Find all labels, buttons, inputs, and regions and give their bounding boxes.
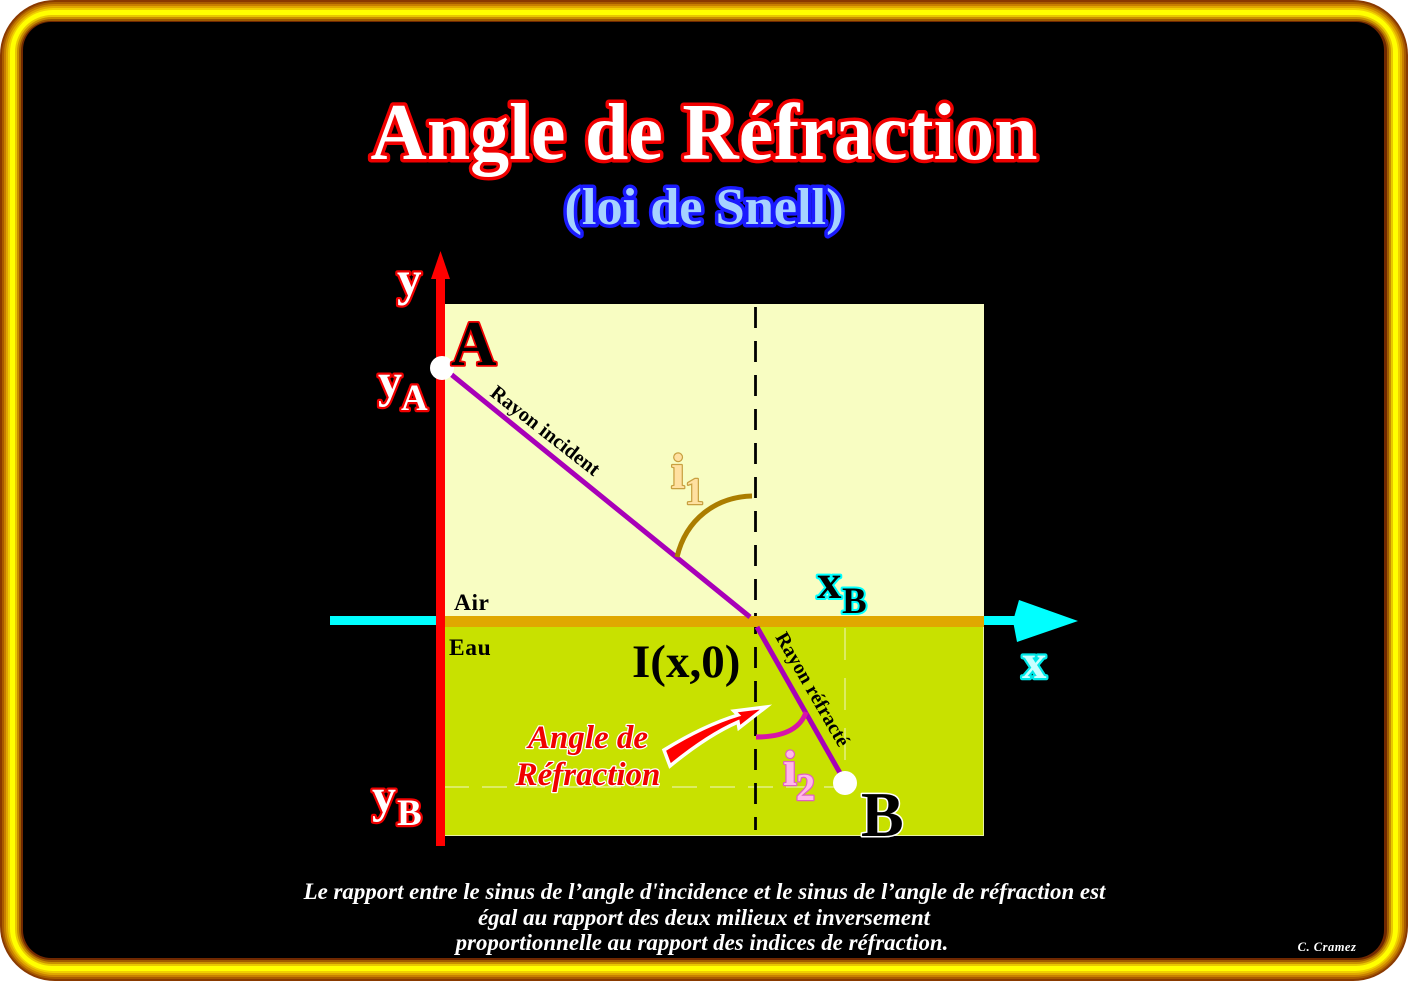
label A: A [451,309,497,379]
label yB: B [397,793,422,834]
incident ray label: Rayon incident [486,382,604,481]
label y: y [397,251,422,306]
label xB [817,554,867,622]
label yA: A [401,378,428,419]
label yA: y [378,355,402,408]
panel: air [444,304,984,618]
panel: water [444,624,984,836]
x axis [330,600,1078,642]
callout: angle de refraction: Angle de [526,720,648,756]
label B: B [861,779,904,850]
y axis [431,251,450,846]
refracted ray label: Rayon réfracté [771,628,854,751]
callout: angle de refraction: Réfraction [515,757,660,793]
panel: refraction diagram [330,251,1078,850]
label i2 [783,740,815,809]
label i2: 2 [796,767,815,809]
explanatory text: égal au rapport des deux milieux et inversement [478,905,931,930]
explanatory text: proportionnelle au rapport des indices de réfraction. [454,930,948,955]
point A [430,356,454,380]
explanatory text: Le rapport entre le sinus de l’angle d'incidence et le sinus de l’angle de réfraction est [303,879,1106,904]
callout: angle de refraction [515,720,660,793]
author credit: C. Cramez [1298,940,1356,954]
explanatory text [303,879,1106,955]
label air: Air [454,590,489,616]
normal dashed line [754,307,757,830]
arrow: callout to angle [664,707,766,766]
incident ray [447,371,750,617]
subtitle: (loi de Snell) [564,179,844,236]
label i1: 1 [685,471,704,513]
label i1: i [671,443,685,499]
title: Angle de Réfraction [370,89,1038,177]
label xB: x [817,554,842,609]
label yB: y [372,770,396,823]
angle arc i1 [677,496,752,557]
y guide for B [444,786,840,788]
label x: x [1022,634,1047,689]
angle arc i2 [756,712,806,737]
label i1 [671,443,704,513]
x guide for B [844,628,846,780]
interface between air and water [444,616,984,627]
label yA [378,355,428,419]
label point I: I(x,0) [632,636,740,688]
label i2: i [783,740,797,796]
refracted ray [757,627,840,773]
label water: Eau [449,635,491,661]
point B [833,771,857,795]
label yB [372,770,422,834]
label xB: B [842,581,867,622]
